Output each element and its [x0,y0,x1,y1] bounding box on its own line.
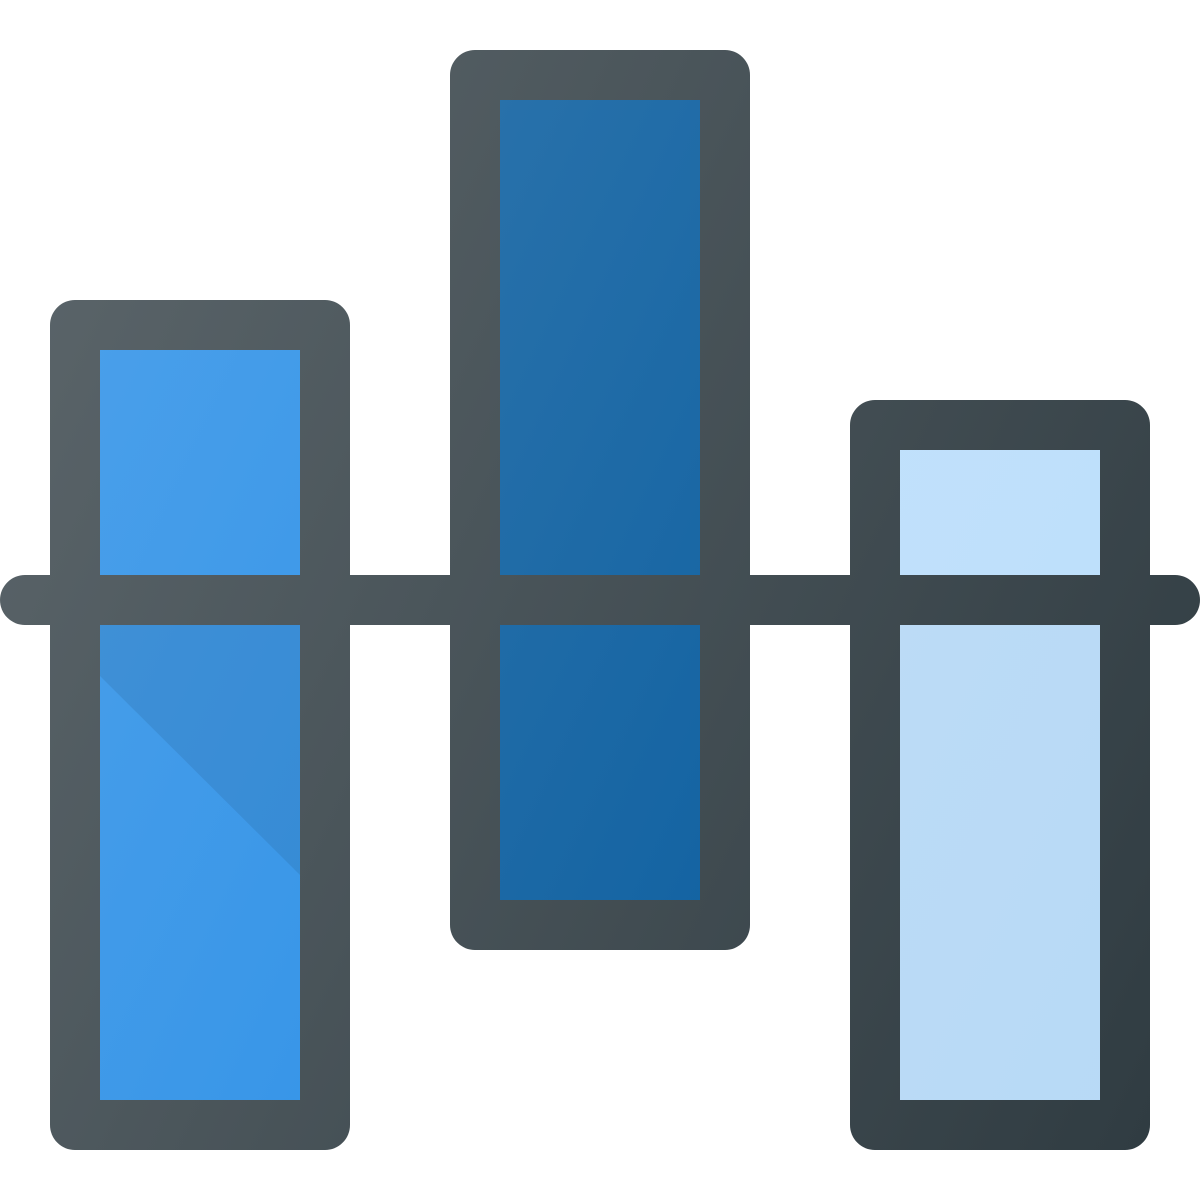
horizontal center axis [0,575,1200,625]
left bar [50,300,350,1150]
middle bar [450,50,750,950]
shade under axis: right bar [900,625,1100,1100]
right bar [850,400,1150,1150]
shadow under axis: left bar [100,625,300,875]
